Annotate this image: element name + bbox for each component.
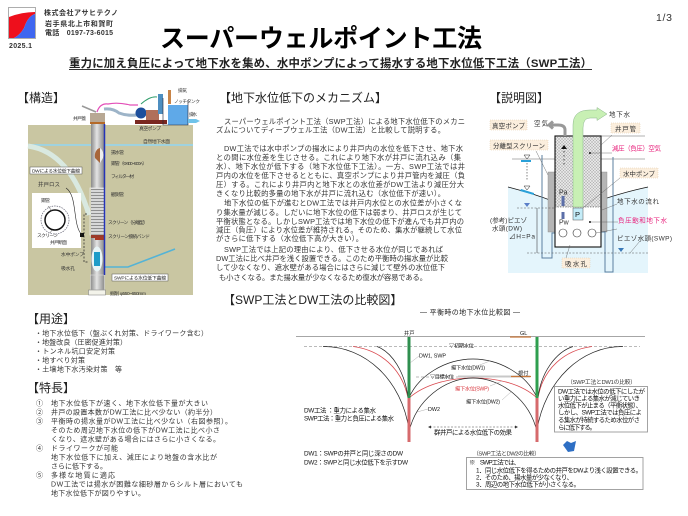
notch tank — [158, 94, 163, 114]
vacuum pump — [135, 120, 167, 124]
list: features: ② — [36, 408, 43, 416]
list: features: さらに低下する。 — [51, 462, 107, 470]
labels: スクリーン（分離型） — [108, 219, 148, 226]
list: uses: ・地すべり対策 — [35, 356, 85, 364]
multi-well effect arrow — [428, 426, 518, 428]
labels: スクリーン — [37, 233, 58, 239]
label: SWP curve: SWPによる水位低下曲線 — [114, 274, 166, 282]
labels: 排気 — [178, 87, 187, 94]
heading: features: 【特長】 — [27, 380, 75, 395]
label: intake hole — [562, 258, 590, 268]
natural water table — [28, 144, 193, 146]
list: features: ⑤ — [36, 472, 43, 480]
callout: SWP vs DW1 — [554, 378, 648, 432]
callout: SWP vs DW2: （SWP工法とDW2の比較） — [473, 450, 540, 458]
list: uses: ・地盤改良（圧密促進対策） — [35, 338, 127, 346]
chart labels: 根付 — [518, 369, 528, 377]
text: mechanism explanation: 戸内の水位を低下させるとともに、真空ポンプにより井戸管内を減圧（負 — [216, 171, 465, 180]
label: vacuum pump: 真空ポンプ — [492, 121, 526, 130]
diagram: well structure — [28, 87, 200, 297]
text: mechanism explanation — [216, 117, 465, 282]
level lines — [517, 208, 648, 253]
title: スーパーウェルポイント工法 — [160, 25, 482, 53]
list: uses: ・土壌地下水汚染対策 等 — [35, 364, 122, 374]
leader lines — [410, 356, 512, 412]
figure labels: 水頭(DW) — [492, 224, 522, 232]
list: features: ③ — [36, 418, 43, 426]
text: mechanism explanation: スーパーウェルポイント工法（SWP工法）による地下水位低下のメカニ — [224, 117, 465, 126]
callout: SWP vs DW2 — [466, 450, 643, 490]
labels: 自然地下水面 — [143, 138, 170, 145]
label: separated screen — [490, 140, 548, 150]
company details: 電話 0197-73-6015 — [45, 28, 113, 37]
text: mechanism explanation: 減圧（負圧）により水位差が維持される。そのため、集水が継続して水位 — [216, 226, 463, 234]
company details: 岩手県北上市和賀町 — [45, 19, 113, 28]
callout: SWP vs DW1: しかし、SWP工法では負圧によ — [558, 408, 642, 416]
wells — [408, 337, 538, 442]
target water level — [416, 376, 458, 378]
heading: mechanism: 【地下水位低下のメカニズム】 — [219, 90, 387, 105]
ground — [28, 125, 193, 295]
list: uses — [35, 328, 208, 374]
label: submersible pump: 水中ポンプ — [623, 169, 656, 178]
legend: DW1 and DW2: DW1：SWPの井戸と同じ深さのDW — [304, 448, 404, 458]
figure labels: Pw — [559, 220, 570, 226]
ground line — [296, 336, 645, 338]
text: mechanism explanation: 地下水位の低下が進むとDW工法では井戸内水位との水位差が小さくな — [224, 198, 462, 208]
drawdown curve SWP — [105, 249, 175, 267]
submersible pump: P — [575, 210, 580, 219]
surface pipes — [82, 106, 96, 112]
text: mechanism explanation: SWP工法では上記の理由により、低下させる水位が同じであれば — [224, 245, 444, 254]
intake holes — [559, 229, 596, 237]
initial water level — [304, 346, 640, 348]
company details — [44, 8, 118, 37]
labels: ノッチタンク — [174, 98, 200, 105]
figure labels: 地下水 — [609, 110, 630, 118]
groundwater background — [508, 187, 648, 273]
inner up arrow — [561, 145, 567, 149]
list: features: ④ — [36, 444, 43, 452]
inset: well section — [32, 193, 84, 248]
page number: 1/3 — [656, 12, 672, 24]
label: well pipe — [611, 123, 640, 133]
filter line — [104, 124, 106, 275]
text: mechanism explanation: との間に水位差を生じさせる。これにより地下水が井戸に流れ込み（集 — [216, 153, 462, 162]
callout: SWP vs DW1: い重力による集水が減じていき — [558, 394, 640, 402]
ground lines — [512, 136, 645, 159]
air arrow — [549, 122, 565, 136]
heading: uses: 【用途】 — [27, 312, 75, 326]
callout: SWP vs DW1: らに低下する。 — [558, 422, 596, 432]
label: separated screen: 分離型スクリーン — [493, 141, 545, 150]
labels: 鋼管 — [41, 197, 50, 204]
label: well pipe: 井戸管 — [615, 124, 636, 133]
label: DW curve — [30, 167, 82, 174]
chart labels: 井戸 — [404, 329, 414, 337]
figure labels: (参考)ピエゾ — [490, 216, 528, 224]
list: features: ① — [36, 400, 43, 408]
figure labels: 減圧（負圧）空気 — [612, 144, 662, 152]
text: mechanism explanation: きくなり比較的多量の地下水が井戸に流れ込む（水位低下が速い）。 — [216, 189, 445, 198]
text: mechanism explanation: して少なくなり、遮水壁がある場合にはさらに減じて壁外の水位低下 — [216, 263, 445, 272]
callout: SWP vs DW1: DW工法では水位の低下にしたが — [558, 386, 646, 396]
labels: 掘削 φ550~650mm — [110, 290, 146, 297]
bracket — [84, 214, 88, 262]
list: uses: ・地下水位低下（盤ぶくれ対策、ドライワーク含む） — [35, 328, 208, 338]
text: mechanism explanation: DW工法に比べ井戸を浅く設置できる。このため平衡時の揚水量が比較 — [216, 254, 449, 263]
chart labels: GL — [520, 331, 527, 337]
text: mechanism explanation: 平衡状態となる。しかしSWP工法では地下水位の低下が進んでも井戸内の — [216, 217, 464, 226]
piezometer tubes — [542, 155, 555, 258]
list: features: そのため周辺地下水位の低下がDW工法に比べ小さ — [51, 426, 220, 434]
heading: explanatory figure: 【説明図】 — [489, 90, 549, 105]
diagram: SWP principle — [490, 108, 672, 273]
labels: 真空ポンプ — [139, 125, 161, 132]
chart labels: ▽初期水位 — [449, 342, 474, 350]
text: mechanism explanation: り集水量が減じる。しだいに地下水位の低下は弱まり、井戸ロスが生じて — [216, 208, 462, 217]
list: features: 地下水位低下に加え、減圧により地盤の含水比が — [51, 452, 217, 462]
text: mechanism explanation: も小さくなる。また揚水量が少なくなるため復水が容易である。 — [219, 273, 427, 282]
text: mechanism explanation: 水）、地下水位が低下する（地下水位低下工法）。一方、SWP工法では井 — [216, 162, 465, 171]
label: vacuum pump — [490, 120, 527, 130]
list: uses: ・トンネル坑口安定対策 — [35, 346, 115, 356]
chart labels: ▽目標水位 — [430, 372, 454, 380]
callout: SWP vs DW2: 1．同じ水位低下を得るための井戸をDWより浅く設置できる。 — [476, 466, 642, 474]
heading: structure: 【構造】 — [17, 91, 65, 105]
legend: collection mechanism: SWP工法：重力と負圧による集水 — [304, 414, 395, 422]
legend: DW1 and DW2 — [304, 448, 409, 466]
labels: 吸水孔 — [61, 265, 75, 272]
SWP curves — [353, 346, 592, 398]
caption: multi-well effect: 群井戸による水位低下の効果 — [434, 428, 513, 436]
drawdown curve DW — [28, 146, 89, 215]
chart: groundwater level comparison — [296, 329, 645, 442]
figure labels: ピエゾ水頭(SWP) — [617, 234, 672, 242]
water table curves — [508, 187, 648, 202]
chart labels: DW2 — [428, 407, 440, 413]
heading: comparison: 【SWP工法とDW工法の比較図】 — [223, 293, 402, 307]
figure labels: Pa — [559, 190, 568, 196]
callout: SWP vs DW2: 3．周辺の地下水位低下が小さくなる。 — [476, 480, 580, 488]
company details: 株式会社アサヒテクノ — [44, 8, 118, 17]
list: features: 地下水位低下が図りやすい。 — [51, 488, 145, 498]
figure labels: 地下水の流れ — [617, 196, 660, 206]
figure labels: ⊿H=Pa — [509, 232, 535, 240]
legend: collection mechanism — [304, 406, 395, 422]
figure labels — [490, 110, 672, 242]
chart labels: DW1, SWP — [419, 354, 446, 360]
chart labels — [404, 329, 528, 413]
labels: 井戸蓋 — [73, 115, 86, 122]
label: submersible pump — [620, 168, 658, 178]
labels: 井戸断面 — [50, 239, 67, 246]
groundwater arrow — [573, 108, 607, 207]
chart subtitle: ― 平衡時の地下水位比較図 ― — [420, 308, 520, 316]
list: features: 平衡時の揚水量がDW工法に比べ少ない（右図参照）。 — [51, 416, 232, 426]
text: mechanism explanation: がさらに低下する（水位低下高が大きい）。 — [216, 234, 363, 243]
icon: company logo — [8, 8, 36, 38]
labels: 観測管 — [111, 191, 124, 198]
water level marks — [520, 155, 624, 252]
callout: SWP vs DW1: 水位低下が止まる（平衡状態）、 — [558, 400, 642, 410]
labels — [37, 87, 200, 297]
legend: collection mechanism: DW工法 ：重力による集水 — [304, 406, 377, 414]
chart labels: 揚下水位(DW1) — [451, 364, 485, 372]
labels: 水中ポンプ — [61, 251, 84, 258]
label: DW curve: DWによる水位低下曲線 — [32, 168, 80, 174]
text: mechanism explanation: 圧）する。これにより井戸内と地下水との水位差がDW工法より減圧分大 — [216, 180, 464, 189]
labels: 鋼管（Φ400~500A） — [111, 160, 147, 167]
label: intake hole: 吸水孔 — [565, 259, 588, 268]
callout: SWP vs DW2: 2．そのため、揚水量が少なくなり、 — [476, 472, 573, 482]
list: features — [36, 398, 243, 498]
list: features: 地下水位低下が速く、地下水位低下量が大きい — [51, 398, 208, 408]
chart labels: 揚下水位(SWP) — [455, 384, 489, 392]
leader dots — [589, 152, 591, 223]
submersible pump — [573, 208, 583, 220]
label: SWP curve — [112, 274, 168, 282]
well pipe — [555, 136, 601, 207]
list: features: DW工法では揚水が困難な細砂層からシルト層においても — [51, 480, 243, 488]
well head — [90, 113, 105, 124]
pressure arrows — [562, 196, 564, 219]
list: features: 多様な地質に適応 — [51, 470, 115, 480]
labels: 排水 — [189, 111, 197, 118]
figure labels: 負圧飽和地下水 — [618, 216, 668, 224]
GL markers — [510, 337, 531, 376]
callout: SWP vs DW2: ※ SWP工法では、 — [469, 458, 520, 466]
figure labels: 空気 — [534, 118, 548, 128]
issue date: 2025.1 — [9, 43, 32, 50]
list: features: くなり、遮水壁がある場合にはさらに小さくなる。 — [51, 434, 220, 444]
legend: DW1 and DW2: DW2：SWPと同じ水位低下を示すDW — [304, 458, 409, 466]
label: well loss: 井戸ロス — [38, 180, 60, 188]
labels: フィルター材 — [111, 173, 134, 180]
callout: SWP vs DW1: （SWP工法とDW1の比較） — [567, 378, 636, 386]
callout: SWP vs DW1: る集水が持続するため水位がさ — [558, 415, 640, 424]
well casing — [91, 113, 104, 295]
list: features: 井戸の設置本数がDW工法に比べ少ない（約半分） — [51, 408, 217, 416]
subtitle: 重力に加え負圧によって地下水を集め、水中ポンプによって揚水する地下水位低下工法（SWP工法） — [69, 56, 592, 70]
text: mechanism explanation: DW工法では水中ポンプの揚水により井戸内の水位を低下させ、地下水 — [224, 144, 464, 153]
chart labels: 揚下水位(DW2) — [466, 398, 500, 406]
DW curves — [323, 346, 623, 432]
list: features: ドライワークが可能 — [51, 444, 118, 452]
screens — [548, 172, 555, 232]
labels: 揚水管 — [111, 149, 124, 156]
text: mechanism explanation: ズムについてディープウェル工法（DW工法）と比較して説明する。 — [216, 126, 445, 134]
icon: blue arrow — [563, 441, 576, 452]
labels: スクリーン接続バンド — [108, 233, 150, 240]
